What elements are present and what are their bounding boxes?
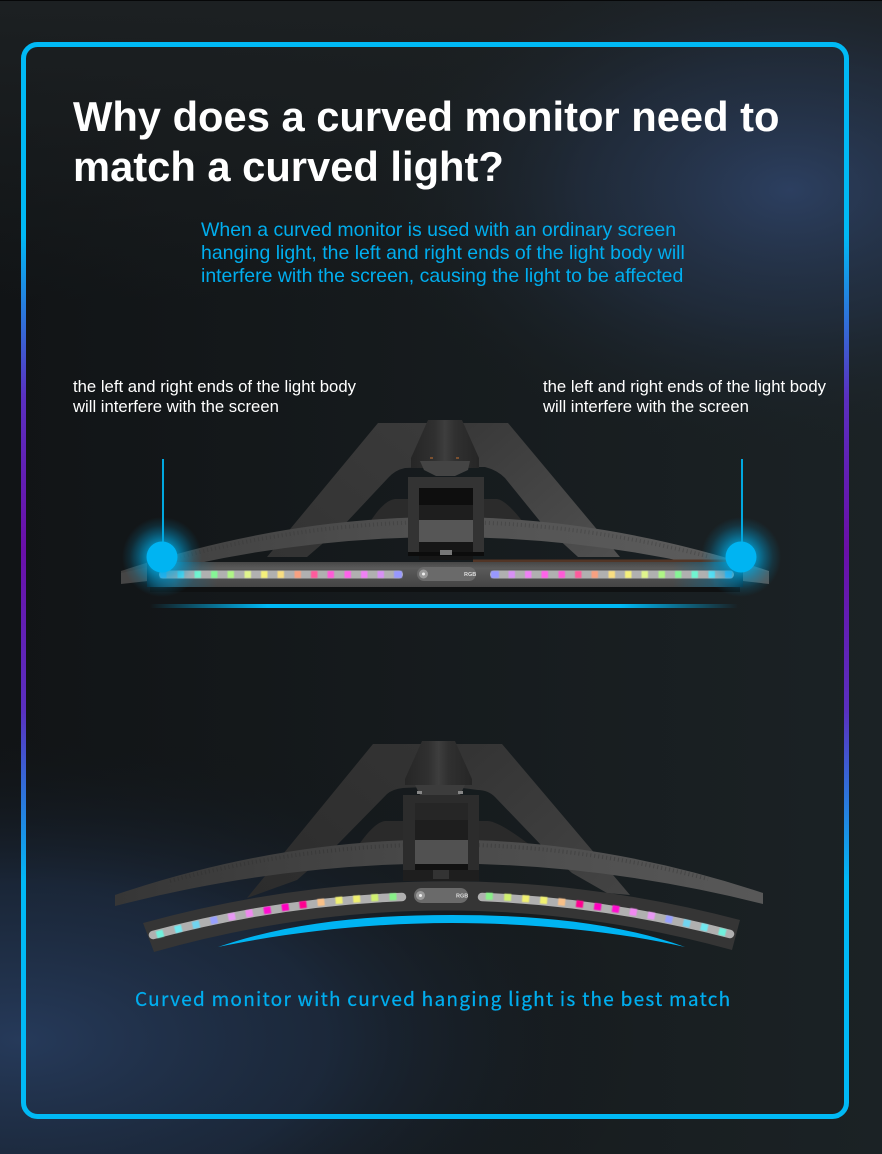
curved blue glow [218, 915, 685, 947]
left callout text: will interfere with the screen [72, 397, 279, 416]
caption: Curved monitor with curved hanging light is the best match [135, 985, 731, 1012]
left led strip [159, 570, 403, 578]
left marker [122, 459, 202, 597]
monitor stand [267, 423, 620, 557]
right led strip [490, 570, 734, 578]
left callout text: the left and right ends of the light body [73, 377, 357, 396]
curved light bar [143, 881, 740, 952]
curved monitor [121, 517, 769, 582]
light bar [121, 560, 769, 592]
right callout text [542, 377, 827, 416]
rgb button [414, 888, 468, 903]
intro text: When a curved monitor is used with an ordinary screen [201, 219, 676, 241]
intro text [201, 219, 685, 287]
right led strip [482, 893, 730, 936]
title: Why does a curved monitor need to [73, 93, 779, 140]
rgb button: RGB [456, 894, 468, 900]
curved monitor [115, 839, 763, 906]
intro text: interfere with the screen, causing the light to be affected [201, 265, 683, 287]
intro text: hanging light, the left and right ends of the light body will [201, 242, 685, 264]
right callout text: the left and right ends of the light body [543, 377, 827, 396]
clamp [403, 795, 479, 881]
right callout text: will interfere with the screen [542, 397, 749, 416]
bottom product: monitor with curved light bar [115, 741, 763, 952]
monitor stand [247, 744, 630, 898]
left callout text [72, 377, 357, 416]
rgb button: RGB [464, 572, 476, 578]
clamp [408, 477, 484, 560]
right marker [701, 459, 781, 597]
title [73, 93, 779, 190]
title: match a curved light? [73, 143, 504, 190]
underline glow bar [150, 604, 738, 608]
left led strip [153, 893, 402, 938]
top product: monitor with straight light bar [121, 420, 769, 608]
rgb button [417, 567, 476, 581]
mounting neck [405, 741, 472, 795]
mounting neck [411, 420, 479, 476]
